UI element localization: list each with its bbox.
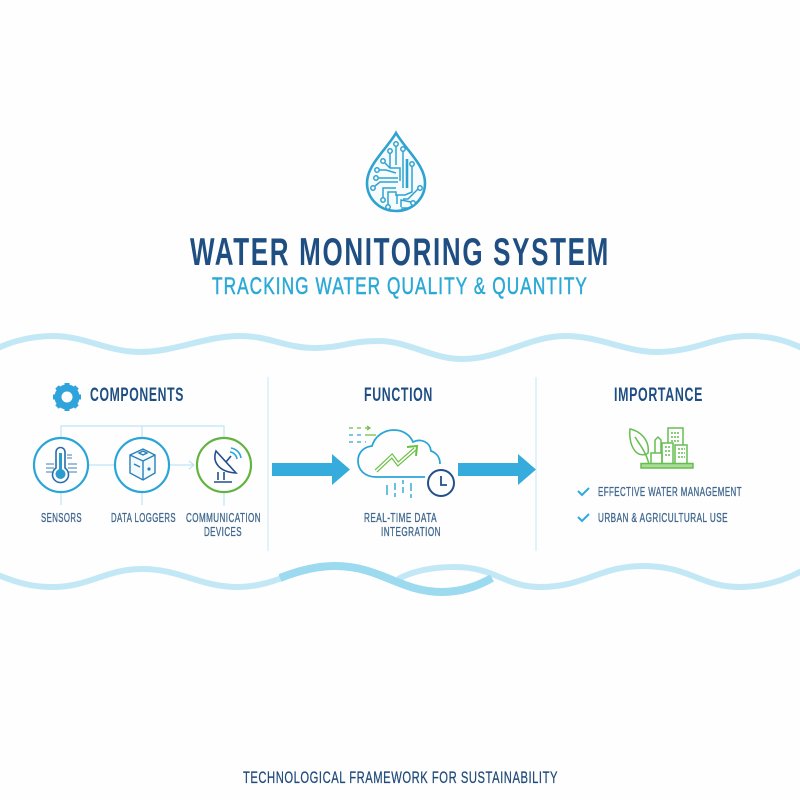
label: communication devices: COMMUNICATION [186,511,261,525]
subtitle: TRACKING WATER QUALITY & QUANTITY [212,273,588,300]
label: real-time data integration: REAL-TIME DATA [364,511,437,525]
label: communication devices [186,511,261,539]
icon: green city and leaf [630,428,693,468]
item: effective water management [578,485,742,499]
divider lines [268,377,536,551]
heading: function: FUNCTION [364,385,433,406]
item: urban and agricultural use [578,511,728,525]
footer tagline: TECHNOLOGICAL FRAMEWORK FOR SUSTAINABILITY [243,769,558,787]
icon: gear [53,383,81,411]
item: urban and agricultural use: URBAN & AGRICULTURAL USE [598,511,728,525]
arrow: function to importance [458,454,536,485]
icon: data logger box [115,438,169,492]
panel: function [349,385,454,539]
icon: communication satellite dish [197,438,251,492]
arrow: components to function [272,454,350,485]
panel: importance [578,385,742,525]
icon: sensors thermometer [34,438,88,492]
label: communication devices: DEVICES [204,525,242,539]
bottom wave [0,566,800,592]
panel: components [34,383,261,539]
label: real-time data integration: INTEGRATION [381,525,441,539]
icon: water drop with circuit [367,133,425,211]
connector lines [61,426,224,506]
heading: components: COMPONENTS [90,385,184,406]
top wave [0,336,800,359]
heading: importance: IMPORTANCE [614,385,703,406]
icon: cloud with trend and clock [349,426,454,498]
label: sensors: SENSORS [41,511,82,525]
label: real-time data integration [364,511,441,539]
label: data loggers: DATA LOGGERS [111,511,176,525]
